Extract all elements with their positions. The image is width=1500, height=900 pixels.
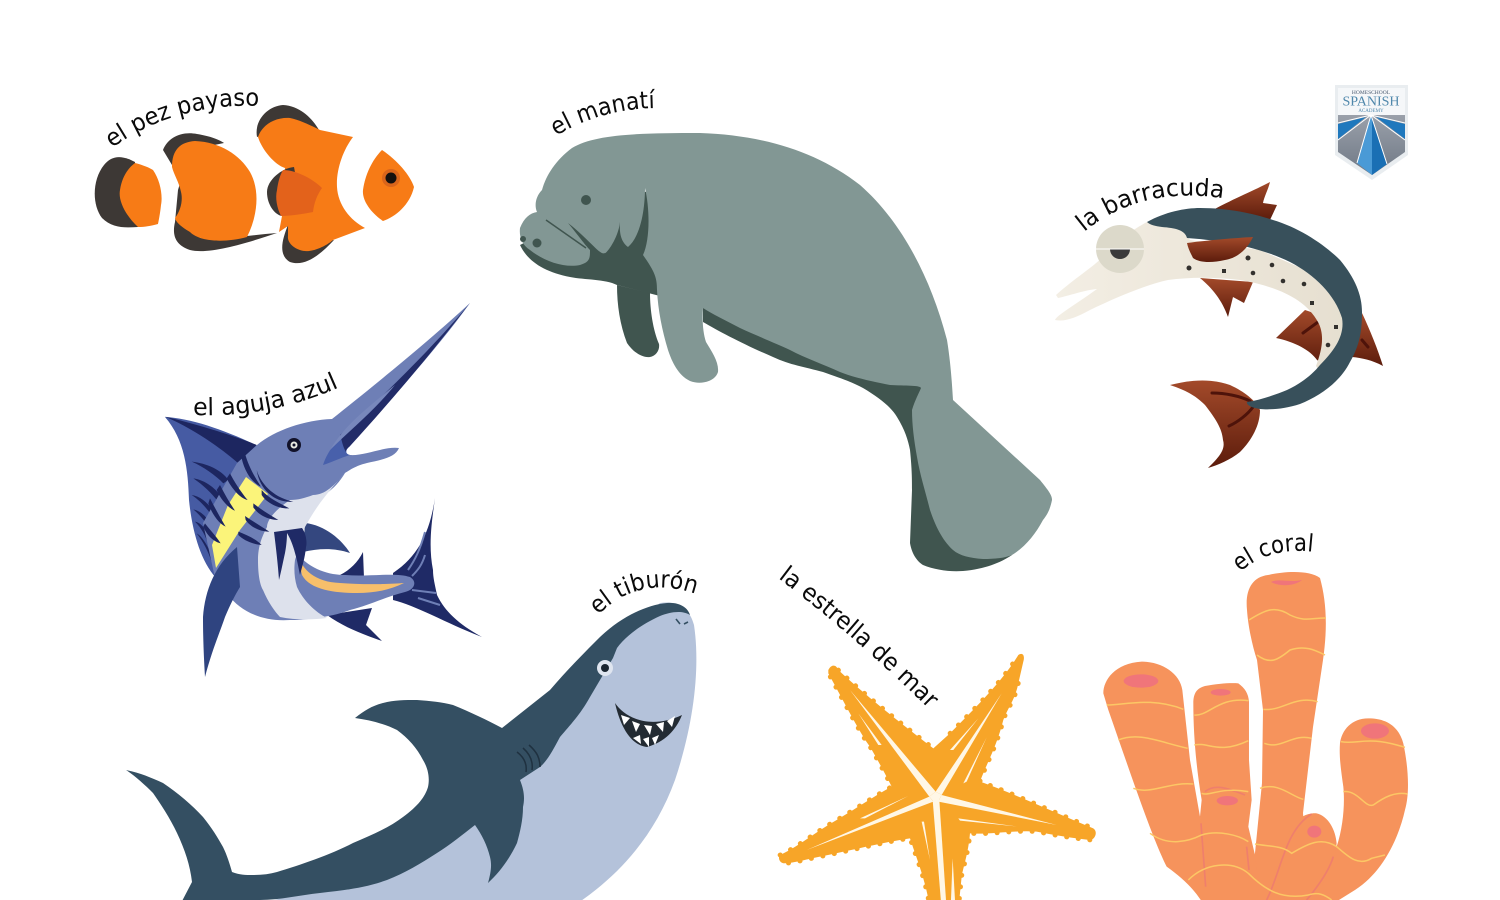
label: el aguja azul: el aguja azul — [194, 372, 337, 418]
marlin tail light strokes — [408, 532, 440, 605]
shield text: ACADEMY — [1358, 109, 1384, 114]
shield text: SPANISH — [1342, 94, 1400, 110]
manatee eye — [581, 195, 591, 205]
barracuda tail — [1170, 380, 1260, 468]
coral tall tube — [1240, 572, 1326, 900]
shield white ray lines — [1338, 115, 1405, 164]
animal: manatee — [520, 133, 1052, 571]
shark eye — [597, 660, 613, 676]
clownfish tail orange — [120, 163, 162, 227]
animal: blue marlin — [165, 303, 482, 677]
barracuda inner fin — [1187, 237, 1253, 262]
clownfish lower fin dark — [282, 225, 334, 263]
marlin bill highlight — [330, 385, 395, 450]
shark mouth — [615, 703, 682, 747]
coral tall tube spot — [1271, 580, 1302, 585]
label: el pez payaso: el pez payaso — [108, 92, 258, 146]
marlin eye — [287, 438, 301, 452]
starfish body — [779, 654, 1096, 900]
coral pink spots — [1124, 674, 1389, 838]
manatee rear shadow — [703, 308, 1012, 571]
clownfish eye — [382, 169, 400, 187]
coral pink lines — [1201, 787, 1333, 900]
clownfish mid fin dark — [163, 133, 277, 251]
shield text: HOMESCHOOL — [1352, 90, 1391, 96]
manatee head shadow — [520, 190, 700, 300]
clownfish tail dark — [95, 157, 138, 227]
shark nostrils — [676, 619, 688, 624]
manatee nostrils — [520, 236, 542, 248]
animal: clownfish — [95, 105, 414, 263]
coral left tube — [1103, 662, 1215, 900]
marlin sail dark rays — [165, 417, 257, 563]
marlin dorsal small fin — [340, 552, 364, 578]
barracuda back — [1147, 208, 1362, 409]
animal: shark — [126, 602, 696, 900]
shield rays — [1338, 115, 1405, 175]
shark teeth — [621, 715, 675, 747]
coral tall tube top waves — [1249, 610, 1326, 660]
marlin bottom fin — [327, 608, 382, 641]
logo: Homeschool Spanish Academy shield — [1335, 85, 1408, 180]
animal: starfish — [779, 654, 1096, 900]
label: el tiburón: el tiburón — [592, 570, 696, 612]
marlin bill shadow — [340, 303, 470, 452]
animal: barracuda — [1055, 182, 1383, 468]
clownfish white body bands — [153, 135, 395, 240]
marlin pectoral dark fin — [274, 528, 307, 580]
barracuda eye — [1096, 225, 1144, 273]
marlin jaw highlight — [323, 420, 362, 465]
manatee mouth creases — [546, 220, 586, 248]
manatee body — [520, 133, 1052, 559]
barracuda rear fin — [1276, 310, 1335, 365]
shark gills — [517, 745, 540, 772]
shield top panel — [1338, 88, 1405, 115]
marlin white belly — [258, 473, 345, 619]
label: el manatí: el manatí — [552, 88, 655, 134]
shield outline — [1335, 85, 1408, 180]
clownfish head orange — [363, 150, 414, 221]
shark back and fins — [126, 603, 690, 900]
clownfish pectoral fin — [267, 167, 322, 216]
marlin body — [203, 303, 470, 620]
barracuda lower fin — [1200, 278, 1253, 317]
label: la estrella de mar: la estrella de mar — [780, 564, 938, 706]
manatee far flipper — [617, 285, 659, 357]
marlin sail fin — [165, 417, 262, 578]
barracuda dots — [1186, 256, 1338, 347]
marlin side stripes — [203, 453, 293, 545]
label: el coral: el coral — [1235, 533, 1313, 569]
shark belly — [260, 602, 696, 900]
barracuda top fin — [1213, 182, 1277, 220]
marlin yellow band — [212, 477, 268, 568]
clownfish top fin dark — [257, 105, 319, 137]
coral second tube — [1193, 683, 1262, 900]
clownfish front body orange — [258, 118, 365, 251]
shield blue rays — [1338, 115, 1405, 175]
coral small front tube — [1262, 813, 1337, 900]
marlin tail fin — [393, 498, 482, 637]
marlin orange stripe — [297, 553, 404, 593]
shield text — [1342, 90, 1400, 114]
clownfish mid body orange — [172, 141, 256, 241]
marlin lower left fin — [203, 547, 240, 677]
animal: coral — [1103, 572, 1408, 900]
marlin pectoral back fin — [303, 523, 350, 553]
starfish center rays — [807, 690, 1057, 900]
label: la barracuda: la barracuda — [1074, 178, 1222, 231]
barracuda head and belly — [1055, 222, 1348, 372]
coral yellow waves — [1107, 700, 1408, 900]
barracuda right fin — [1352, 313, 1383, 366]
starfish bumps — [780, 655, 1093, 900]
coral right tube — [1295, 718, 1408, 900]
coral lower tubes — [1103, 662, 1408, 900]
barracuda tail marks — [1212, 322, 1368, 426]
